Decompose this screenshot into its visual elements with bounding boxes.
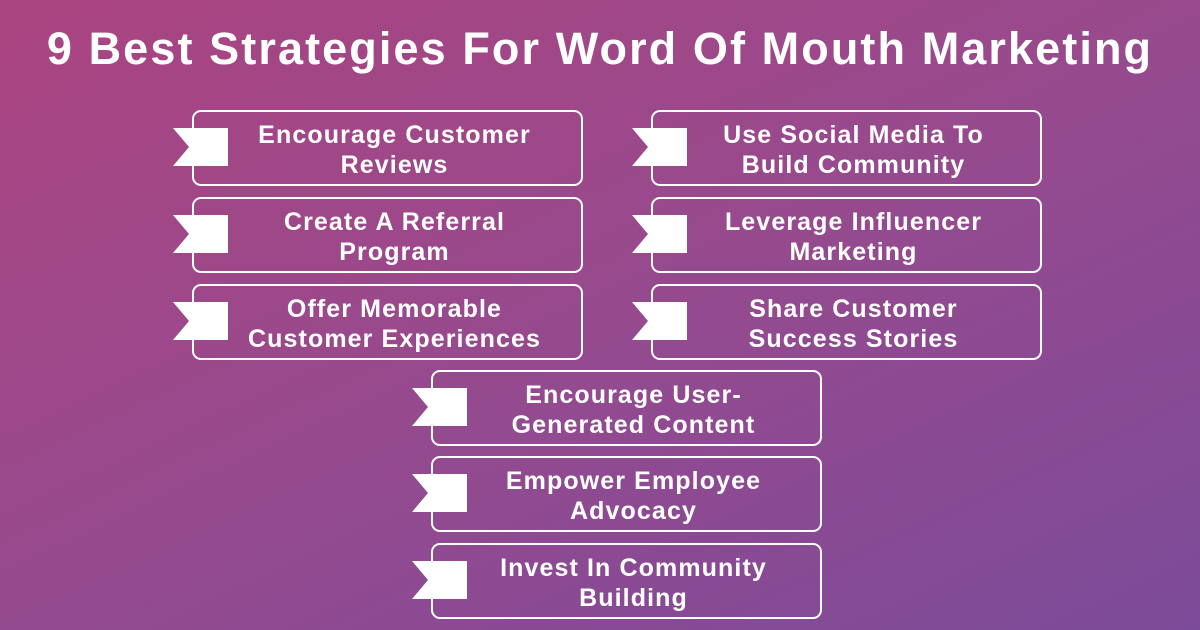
icon: ribbon: [632, 128, 687, 166]
title: 9 Best Strategies For Word Of Mouth Marketing: [47, 23, 1153, 74]
card: influencer: [651, 197, 1042, 273]
icon: ribbon: [173, 302, 228, 340]
card: employee advocacy: Advocacy: [570, 497, 697, 525]
icon: ribbon: [632, 215, 687, 253]
card: influencer: Leverage Influencer: [725, 208, 982, 236]
card: referral: Program: [339, 238, 450, 266]
card: encourage customer reviews: Encourage Customer: [258, 121, 531, 149]
card: social media: Build Community: [742, 151, 965, 179]
card: memorable experiences: Offer Memorable: [287, 295, 502, 323]
card: success stories: Share Customer: [749, 295, 958, 323]
card: success stories: [651, 284, 1042, 360]
icon: ribbon: [412, 474, 467, 512]
card: memorable experiences: [192, 284, 583, 360]
card: community building: Invest In Community: [500, 554, 767, 582]
icon: ribbon: [412, 561, 467, 599]
card: referral: Create A Referral: [284, 208, 505, 236]
card: community building: Building: [579, 584, 688, 612]
card: community building: [431, 543, 822, 619]
card: social media: [651, 110, 1042, 186]
card: UGC: Generated Content: [512, 411, 755, 439]
card: employee advocacy: [431, 456, 822, 532]
card: success stories: Success Stories: [749, 325, 958, 353]
card: social media: Use Social Media To: [723, 121, 984, 149]
card: encourage customer reviews: Reviews: [341, 151, 448, 179]
card: referral: [192, 197, 583, 273]
icon: ribbon: [632, 302, 687, 340]
card: employee advocacy: Empower Employee: [506, 467, 761, 495]
card: UGC: Encourage User-: [525, 381, 742, 409]
card: influencer: Marketing: [790, 238, 917, 266]
card: encourage customer reviews: [192, 110, 583, 186]
icon: ribbon: [173, 215, 228, 253]
card: UGC: [431, 370, 822, 446]
icon: ribbon: [412, 388, 467, 426]
icon: ribbon: [173, 128, 228, 166]
card: memorable experiences: Customer Experiences: [248, 325, 541, 353]
